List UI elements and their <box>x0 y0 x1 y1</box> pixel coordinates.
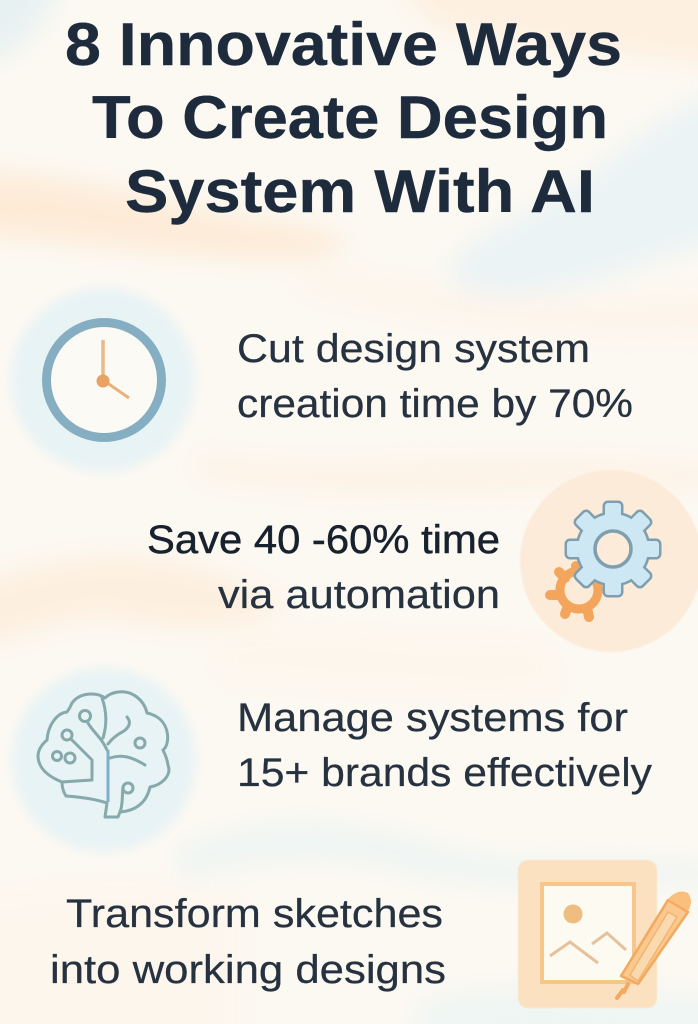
icon: gears <box>520 470 698 652</box>
text: save time via automation: via automation <box>218 573 500 617</box>
text: transform sketches: Transform sketches <box>66 892 443 936</box>
title: To Create Design <box>92 84 608 151</box>
text: cut design system time: creation time by 70% <box>237 382 633 426</box>
text: cut design system time: Cut design system <box>237 327 590 371</box>
text: cut design system time <box>237 327 633 426</box>
title <box>65 11 622 225</box>
title: System With AI <box>125 158 595 225</box>
icon: image and pencil <box>518 860 691 1008</box>
icon: clock <box>11 288 195 472</box>
icon: brain <box>12 668 196 852</box>
icon: small orange gear <box>550 566 598 617</box>
text: transform sketches: into working designs <box>50 948 446 992</box>
text: manage systems <box>237 696 652 795</box>
text: save time via automation: Save 40 -60% time <box>147 518 500 562</box>
text: save time via automation <box>147 518 500 617</box>
icon: pencil <box>617 891 691 998</box>
title: 8 Innovative Ways <box>65 11 622 78</box>
icon: large blue gear <box>567 503 659 595</box>
text: transform sketches <box>50 892 446 992</box>
text: manage systems: Manage systems for <box>237 696 628 740</box>
text: manage systems: 15+ brands effectively <box>237 751 652 795</box>
